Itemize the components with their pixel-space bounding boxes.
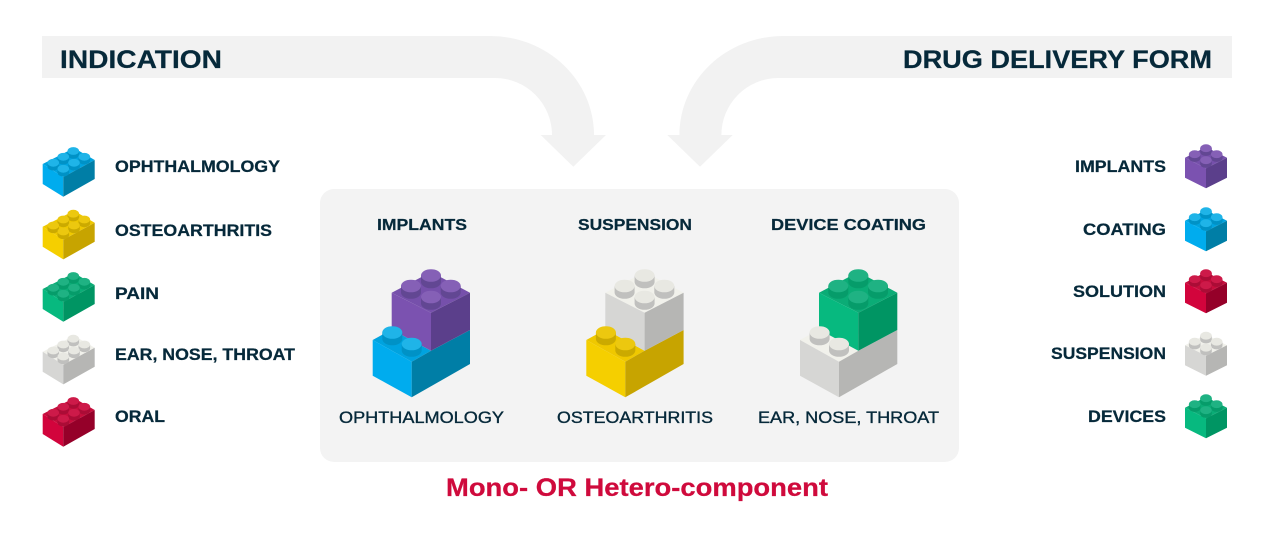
label: solution: SOLUTION bbox=[1073, 283, 1166, 301]
icon: white brick bbox=[43, 335, 95, 384]
icon: green brick stacked on white brick bbox=[800, 269, 897, 397]
icon: yellow brick bbox=[43, 210, 95, 259]
heading: suspension: SUSPENSION bbox=[578, 217, 692, 234]
icon: green brick bbox=[43, 272, 95, 322]
label: osteoarthritis: OSTEOARTHRITIS bbox=[557, 409, 713, 427]
label: osteoarthritis: OSTEOARTHRITIS bbox=[115, 222, 272, 240]
label: devices: DEVICES bbox=[1088, 408, 1166, 426]
label: ear, nose, throat: EAR, NOSE, THROAT bbox=[115, 346, 295, 364]
label: suspension: SUSPENSION bbox=[1051, 345, 1166, 363]
heading: indication: INDICATION bbox=[60, 46, 222, 74]
icon: blue brick bbox=[43, 147, 95, 197]
label: implants: IMPLANTS bbox=[1075, 158, 1166, 176]
label: ophthalmology: OPHTHALMOLOGY bbox=[115, 158, 280, 176]
heading: drug delivery form: DRUG DELIVERY FORM bbox=[903, 46, 1212, 74]
icon: white brick stacked on yellow brick bbox=[586, 269, 684, 397]
icon: red brick bbox=[1185, 269, 1227, 313]
label: ear, nose, throat: EAR, NOSE, THROAT bbox=[758, 409, 939, 427]
label: ophthalmology: OPHTHALMOLOGY bbox=[339, 409, 504, 427]
panel: indication list bbox=[43, 147, 295, 447]
icon: white brick bbox=[1185, 332, 1227, 376]
arrow: indication header band curving down bbox=[42, 36, 606, 167]
label: coating: COATING bbox=[1083, 221, 1166, 239]
icon: green brick bbox=[1185, 394, 1227, 438]
panel: drug delivery form list bbox=[1051, 144, 1227, 438]
icon: purple brick bbox=[1185, 144, 1227, 188]
label: pain: PAIN bbox=[115, 285, 159, 303]
icon: blue brick bbox=[1185, 207, 1227, 251]
arrow: drug delivery form header band curving down bbox=[667, 36, 1232, 167]
label: oral: ORAL bbox=[115, 408, 165, 426]
icon: red brick bbox=[43, 397, 95, 447]
heading: device coating: DEVICE COATING bbox=[771, 217, 926, 234]
heading: implants: IMPLANTS bbox=[377, 217, 467, 234]
panel: combinations background bbox=[320, 189, 959, 462]
callout: mono- or hetero-component: Mono- OR Hetero-component bbox=[446, 474, 829, 502]
icon: purple brick stacked on blue brick bbox=[373, 269, 470, 397]
